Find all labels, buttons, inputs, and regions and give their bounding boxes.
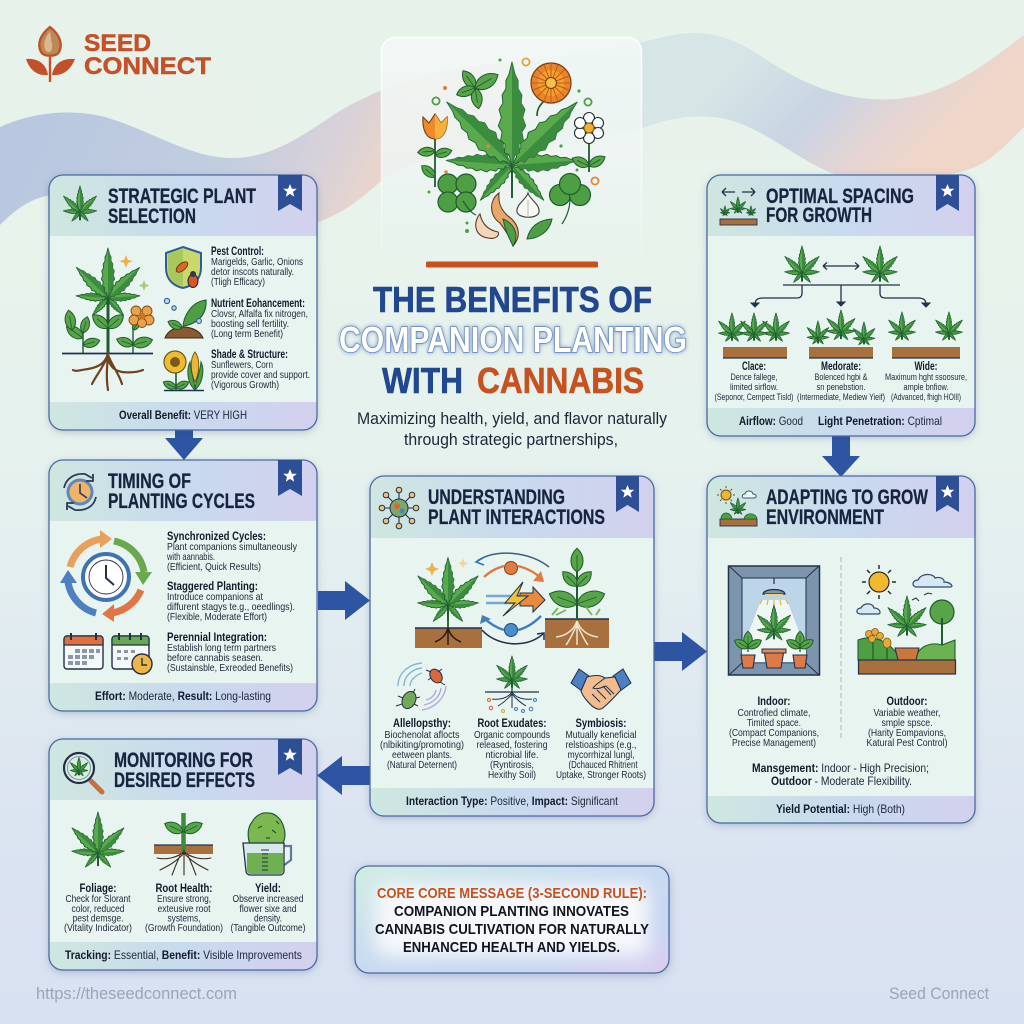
footer: brand name: Seed Connect (889, 985, 989, 1003)
text: close: Dence fallege, (730, 372, 778, 382)
text: foliage: color, reduced (72, 904, 125, 915)
text: moderate: sn penebstion. (816, 382, 866, 392)
text: shade and structure: (Vigorous Growth) (211, 380, 279, 391)
arrow: spacing to environment (822, 436, 860, 477)
heading: DESIRED EFFECTS (114, 769, 255, 792)
text: synchronized cycles: with aannabis. (166, 552, 215, 563)
text: nutrient enhancement: Nutrient Eohancement: (211, 298, 305, 310)
heading: PLANTING CYCLES (108, 490, 255, 513)
text: indoor: Precise Management) (732, 738, 816, 749)
logo wordmark: SEED (84, 30, 151, 57)
text: indoor: Indoor: (758, 696, 790, 708)
item: pest control (166, 246, 303, 288)
text: synchronized cycles (166, 531, 298, 573)
text: close: limited sirflow. (730, 382, 778, 392)
heading: UNDERSTANDING (428, 486, 565, 509)
icon: left clover (438, 174, 476, 215)
text: perennial integration: Perennial Integration: (167, 632, 267, 644)
text: allelopathy: eetween plants. (392, 750, 452, 761)
logo wordmark (84, 30, 211, 80)
text: nutrient enhancement: boosting sell fertility. (211, 319, 289, 330)
footer: airflow and light penetration: Airflow: Good (739, 414, 803, 428)
text: root exudates: nticrobial life. (486, 750, 538, 761)
illustration: wide spacing (887, 312, 964, 358)
text: outdoor: Outdoor: (886, 696, 928, 708)
text: shade and structure (211, 349, 310, 391)
arrow: interactions to monitoring (317, 756, 370, 795)
text: synchronized cycles: (Efficient, Quick Results) (167, 562, 261, 573)
footer: airflow and light penetration (739, 414, 942, 428)
text: yield: (Tangible Outcome) (230, 923, 306, 934)
icon: leaf with root exudates (485, 656, 539, 712)
text: outdoor: Variable weather, (874, 708, 940, 719)
icon: yield measuring cup (243, 813, 291, 875)
text: outdoor: Katural Pest Control) (866, 738, 948, 749)
icon: marigold (531, 63, 571, 116)
text: pest control (211, 246, 303, 288)
text: yield (230, 883, 306, 934)
text: foliage: pest demsge. (72, 914, 124, 924)
heading: SELECTION (108, 205, 196, 228)
text: yield: flower sixe and (240, 904, 297, 915)
panel: optimal spacing for growth (707, 175, 975, 436)
exchange arrows (425, 553, 549, 644)
text: pest control: detor inscots naturally. (211, 267, 294, 278)
text: root exudates: Root Exudates: (478, 718, 546, 730)
illustration: outdoor garden (857, 565, 956, 674)
icon: bookmark star (936, 476, 959, 512)
text: symbiosis: mycorrhizal lungl, (568, 750, 634, 761)
text: foliage (64, 883, 132, 934)
subtitle: Maximizing health, yield, and flavor naturally (357, 409, 667, 428)
footer: effort and result: Effort: Moderate, Result: Long-lasting (95, 689, 271, 703)
icon: sprout in soil (164, 298, 206, 338)
text: synchronized cycles: Synchronized Cycles: (167, 531, 266, 543)
text: root health: Root Health: (156, 883, 212, 895)
heading: TIMING OF (108, 470, 191, 493)
panel: strategic plant selection (49, 175, 317, 430)
text: perennial integration: Establish long term partners (167, 643, 276, 654)
icon: seed with leaves (26, 27, 75, 82)
heading (108, 470, 255, 513)
left cannabis with soil (414, 558, 482, 648)
text: nutrient enhancement: (Long term Benefit) (211, 329, 283, 340)
accent bar (426, 262, 598, 268)
text: moderate (797, 361, 885, 402)
text: pest control: Marigelds, Garlic, Onions (211, 257, 303, 268)
text: wide (885, 361, 967, 402)
logo (26, 27, 211, 82)
text: wide: (Advanced, fhigh HOIll) (891, 392, 961, 402)
text: root exudates: released, fostering (476, 740, 548, 751)
text: root exudates: Organic compounds (474, 730, 550, 741)
heading: PLANT INTERACTIONS (428, 506, 605, 529)
illustration: clock with cycle arrows (60, 530, 152, 622)
text: wide: Wide: (914, 361, 938, 373)
footer: website url: https://theseedconnect.com (36, 985, 237, 1003)
text: staggered planting: Introduce companions at (167, 592, 263, 603)
text: staggered planting (167, 581, 295, 623)
text: symbiosis: (Dchauced Rhitrient (568, 760, 638, 771)
text: nutrient enhancement (211, 298, 308, 340)
text: perennial integration: (Sustainsble, Exreoded Benefits) (167, 663, 293, 674)
footer: tracking and benefit: Tracking: Essential, Benefit: Visible Improvements (65, 948, 302, 962)
illustration: indoor grow window (728, 566, 820, 675)
text: allelopathy: Allellopsthy: (393, 718, 451, 730)
text: outdoor (866, 696, 948, 749)
text: shade and structure: Shade & Structure: (211, 349, 288, 361)
text: outdoor: (Harity Eompavions, (868, 728, 946, 739)
footer: yield potential: Yield Potential: High (Both) (776, 802, 905, 816)
item: nutrient enhancement (164, 298, 308, 340)
callout text (375, 885, 649, 956)
icon: cannabis leaf (61, 186, 99, 222)
divider (840, 557, 842, 738)
heading: MONITORING FOR (114, 749, 253, 772)
text: management: Mansgement: Indoor - High Precision; (752, 761, 929, 775)
text: wide: ample bnfiow. (904, 382, 948, 392)
text: allelopathy (380, 718, 464, 771)
footer: interaction type: Interaction Type: Positive, Impact: Significant (406, 794, 619, 808)
icon: bookmark star (278, 739, 302, 775)
text: nutrient enhancement: Clovsr, Alfalfa fix nitrogen, (211, 309, 308, 320)
icon: garlic and leaves (476, 193, 552, 246)
text: root exudates: Hexithy Soil) (488, 770, 536, 781)
text: root exudates: (Ryntirosis, (490, 760, 534, 771)
text: root health: (Growth Foundation) (145, 923, 223, 934)
icon: bookmark star (936, 175, 959, 211)
right plant with soil (545, 548, 609, 648)
text: allelopathy: (nlbikiting/promoting) (380, 740, 464, 751)
arrow: interactions to environment (654, 632, 707, 671)
icon: clock cycle (64, 474, 96, 510)
text: staggered planting: Staggered Planting: (167, 581, 258, 593)
heading (766, 486, 928, 529)
logo wordmark: CONNECT (84, 53, 211, 80)
callout text: CORE CORE MESSAGE (3-SECOND RULE): (377, 885, 647, 902)
text: synchronized cycles: Plant companions simultaneously (167, 542, 298, 553)
text: root health (145, 883, 223, 934)
heading: FOR GROWTH (766, 204, 872, 227)
text: foliage: Foliage: (80, 883, 116, 895)
title: CANNABIS (477, 360, 644, 401)
text: close: Clace: (742, 361, 766, 373)
text: pest control: (Tligh Efficacy) (211, 277, 265, 288)
icon: central cannabis leaf (438, 62, 586, 204)
text: yield: Observe increased (232, 894, 304, 905)
text: moderate: Bolenced hgbi & (814, 372, 868, 382)
callout text: CANNABIS CULTIVATION FOR NATURALLY (375, 921, 649, 938)
icon: daisy (570, 112, 607, 172)
text: staggered planting: (Flexible, Moderate Effort) (167, 612, 267, 623)
footer: overall benefit: Overall Benefit: VERY HIGH (119, 408, 247, 422)
icon: magnifier over leaf (64, 753, 102, 792)
text: close (714, 361, 794, 402)
text: yield: density. (254, 914, 282, 924)
text: wide: Maximum hght ssoosure, (885, 372, 967, 382)
text: pest control: Pest Control: (211, 246, 264, 258)
arrow: selection to timing (165, 430, 203, 460)
icon: bookmark star (278, 175, 302, 211)
illustration: close spacing (717, 313, 791, 358)
heading: STRATEGIC PLANT (108, 185, 256, 208)
text: moderate: (Intermediate, Mediew Yieif) (797, 392, 885, 402)
icon: foliage leaf (69, 812, 127, 869)
text: management (752, 761, 929, 788)
text: management: Outdoor - Moderate Flexibility. (771, 774, 912, 788)
panel: adapting to grow environment (707, 476, 975, 823)
text: root health: exteusive root (158, 904, 211, 915)
icon: interaction network (379, 487, 419, 529)
icon: sunflower and corn (162, 351, 204, 391)
heading: ENVIRONMENT (766, 506, 884, 529)
text: staggered planting: diffurent stagys te.g., oeedlings). (167, 602, 295, 613)
icon: tulip (417, 114, 453, 187)
text: perennial integration (167, 632, 293, 674)
text: close: (Seponor, Cempect Tisld) (714, 392, 794, 402)
text: allelopathy: (Natural Deternent) (387, 760, 457, 771)
text: allelopathy: Biochenolat aflocts (384, 730, 460, 741)
heading: ADAPTING TO GROW (766, 486, 928, 509)
subtitle (357, 409, 667, 449)
heading (108, 185, 256, 228)
text: symbiosis: relstioaships (e.g., (566, 740, 636, 751)
panel: understanding plant interactions (370, 476, 654, 816)
heading (428, 486, 605, 529)
subtitle: through strategic partnerships, (404, 430, 618, 449)
accent dots and rings (428, 58, 599, 233)
text: root exudates (474, 718, 550, 781)
text: moderate: Medorate: (821, 361, 861, 373)
heading (766, 185, 914, 227)
title (339, 279, 687, 401)
text: indoor (729, 696, 819, 749)
text: foliage: Check for Slorant (66, 894, 131, 905)
icon: mint sprig (455, 68, 501, 110)
heading (114, 749, 255, 792)
diagram: spacing tree (751, 246, 930, 307)
icon: handshake (571, 669, 631, 709)
icon: bookmark star (278, 460, 302, 496)
text: indoor: Timited space. (747, 718, 801, 729)
callout text: ENHANCED HEALTH AND YIELDS. (403, 939, 620, 956)
icon: root health (154, 813, 213, 875)
text: shade and structure: provide cover and support. (211, 370, 310, 381)
text: shade and structure: Sunflewers, Corn (211, 360, 273, 371)
item: shade and structure (162, 349, 310, 391)
callout text: COMPANION PLANTING INNOVATES (394, 903, 629, 920)
title: COMPANION PLANTING (339, 319, 687, 360)
icon: sun cloud and bed (717, 486, 757, 526)
text: indoor: Controfied climate, (738, 708, 810, 719)
title: THE BENEFITS OF (373, 279, 652, 320)
arrow: timing to interactions (318, 581, 370, 620)
title: WITH (382, 360, 463, 401)
illustration: plant with roots (62, 248, 154, 390)
text: yield: Yield: (255, 883, 281, 895)
icon: bookmark star (616, 476, 639, 512)
text: symbiosis (556, 718, 646, 781)
text: perennial integration: before cannabis seasen. (167, 653, 263, 664)
text: outdoor: smple spsce. (882, 718, 932, 729)
heading: OPTIMAL SPACING (766, 185, 914, 208)
panel: timing of planting cycles (49, 460, 317, 711)
text: indoor: (Compact Companions, (729, 728, 819, 739)
illustration: plant exchange (414, 548, 609, 648)
icon: spaced plants (720, 188, 757, 225)
icon: right clover (550, 174, 590, 224)
text: symbiosis: Mutually keneficial (566, 730, 636, 741)
footer: airflow and light penetration: Light Penetration: Cptimal (818, 414, 942, 428)
text: root health: systems, (168, 914, 200, 924)
text: symbiosis: Uptake, Stronger Roots) (556, 770, 646, 781)
text: symbiosis: Symbiosis: (576, 718, 626, 730)
illustration: moderate spacing (806, 310, 876, 358)
icon: insects with waves (396, 663, 446, 711)
hero illustration panel (382, 38, 642, 270)
text: root health: Ensure strong, (157, 894, 211, 905)
icon: shield with bug (166, 247, 201, 288)
callout: core message (355, 866, 669, 973)
text: foliage: (Vitality Indicator) (64, 923, 132, 934)
panel: monitoring for desired effects (49, 739, 317, 970)
icon: calendars (64, 633, 152, 674)
